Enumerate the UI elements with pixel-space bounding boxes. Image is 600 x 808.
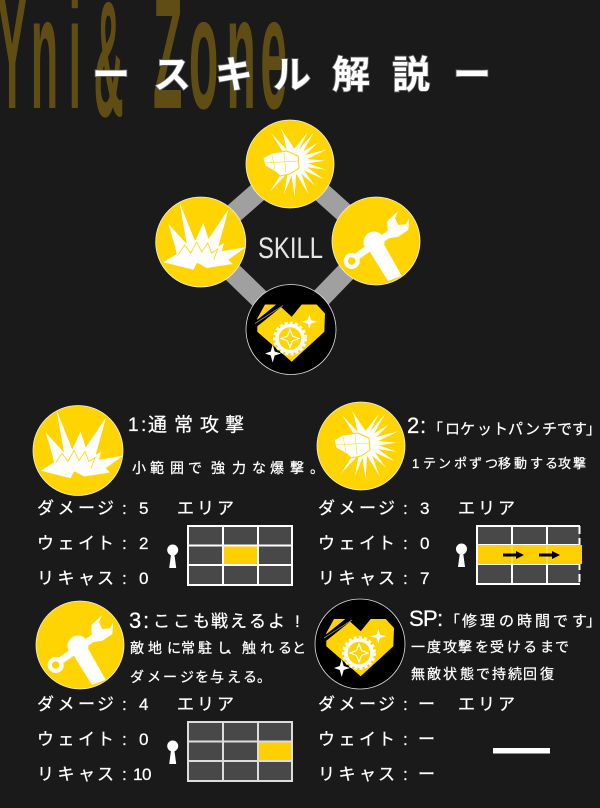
stats: リキャス:ー: [318, 765, 435, 784]
icon: explosion: [156, 197, 246, 287]
icon: player pin: [167, 740, 178, 764]
heading quote: 「修理の時間です」: [445, 613, 600, 630]
area grid: [477, 526, 582, 584]
stats: リキャス:10: [37, 765, 151, 784]
area grid: [188, 722, 292, 781]
panel: skill 2: [317, 402, 600, 588]
heading: 2:: [407, 413, 426, 438]
stats: ダメージ:5: [37, 499, 148, 518]
stats: エリア: [177, 499, 234, 518]
icon: heart and gear: [315, 599, 405, 689]
area grid: [188, 526, 292, 585]
stats: [318, 499, 515, 588]
stats: エリア: [458, 695, 515, 714]
description: ダメージを与える。: [130, 669, 271, 685]
stats: ダメージ:ー: [318, 695, 435, 714]
stats: ダメージ:3: [318, 499, 429, 518]
stats: ウェイト:ー: [318, 730, 435, 749]
stats: リキャス:0: [37, 569, 148, 588]
stats: ダメージ:4: [37, 695, 148, 714]
center label: SKILL: [258, 232, 323, 265]
stats: ウェイト:2: [37, 534, 148, 553]
stats: [318, 695, 515, 784]
icon: wrench: [36, 601, 124, 689]
description: 無敵状態で持続回復: [411, 666, 554, 682]
arrow: [503, 551, 524, 559]
heading: 3:: [129, 608, 149, 633]
title: ースキル解説ー: [92, 55, 491, 97]
icon: fist: [246, 120, 334, 208]
heading: SP:: [409, 606, 443, 631]
stats: ウェイト:0: [37, 730, 148, 749]
skill diamond diagram: [156, 120, 420, 374]
icon: fist: [317, 402, 405, 490]
description: 敵地に常駐し、触れると: [130, 640, 306, 656]
heading quote: 「ロケットパンチです」: [428, 421, 600, 438]
icon: heart and gear: [246, 284, 336, 374]
icon: wrench: [332, 197, 420, 285]
heading: 1:通常攻撃: [128, 414, 244, 436]
panel: skill SP: [315, 599, 600, 784]
no area bar: [493, 748, 550, 754]
background lettering: [0, 0, 287, 152]
stats: エリア: [177, 695, 234, 714]
icon: explosion: [33, 406, 123, 496]
stats: リキャス:7: [318, 569, 429, 588]
panel: skill 3: [36, 601, 306, 784]
panel: skill 1: [33, 406, 324, 588]
icon: player pin: [456, 544, 467, 567]
stats: ウェイト:0: [318, 534, 429, 553]
stats: エリア: [458, 499, 515, 518]
description: 1テンポずつ移動する攻撃: [412, 456, 586, 471]
description: 小範囲で強力な爆撃。: [132, 460, 324, 476]
heading text: ここも戦えるよ!: [153, 612, 300, 631]
stats: [37, 499, 234, 588]
description: 一度攻撃を受けるまで: [411, 639, 569, 655]
stats: [37, 695, 234, 784]
icon: player pin: [167, 544, 178, 568]
arrow: [539, 551, 560, 559]
